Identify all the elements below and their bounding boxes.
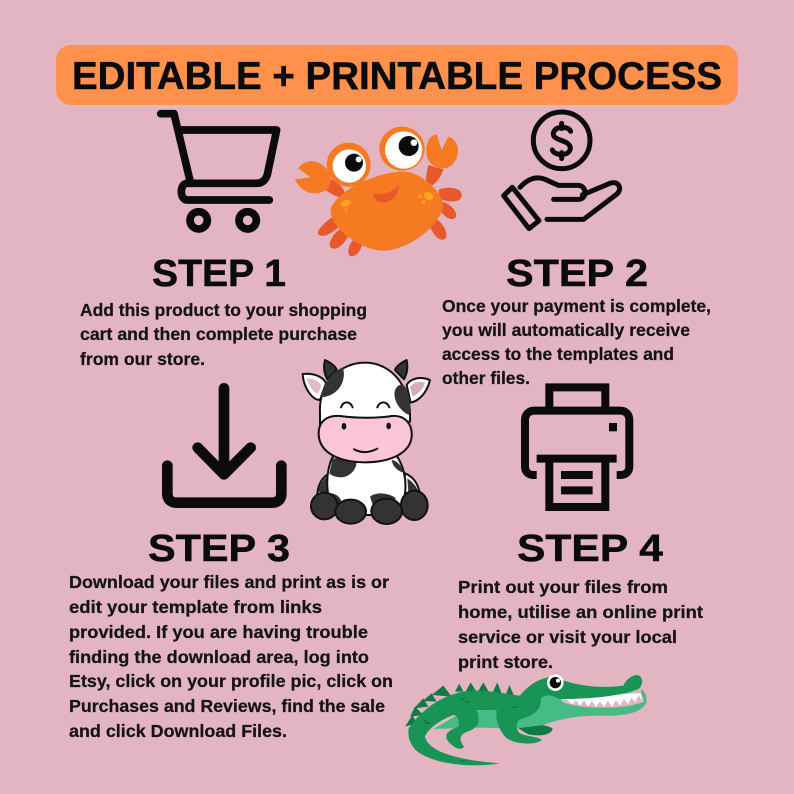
text: step 3 instructions: and click Download Files.	[69, 721, 287, 741]
crab legs	[318, 165, 462, 256]
heading: step 1: STEP 1	[152, 253, 286, 295]
text: step 4 instructions: Print out your files from	[458, 577, 668, 597]
crocodile far leg	[518, 725, 553, 735]
cow head	[320, 363, 410, 427]
crocodile skin spots	[423, 698, 518, 762]
heading: step 3: STEP 3	[148, 528, 290, 570]
icon: hand holding dollar coin	[504, 112, 620, 229]
text: step 3 instructions: provided. If you are having trouble	[69, 622, 368, 642]
text: step 3 instructions: Etsy, click on your profile pic, click on	[69, 671, 393, 691]
crab claws	[295, 161, 330, 193]
crocodile back spikes	[405, 682, 514, 727]
text: step 4 instructions: print store.	[458, 652, 553, 672]
cow thighs	[317, 473, 333, 500]
text: step 3 instructions: finding the download area, log into	[69, 647, 369, 667]
crocodile mouth and lower jaw	[513, 690, 647, 728]
text: step 4 instructions: home, utilise an online print	[458, 602, 703, 622]
text: step 1 instructions	[80, 300, 367, 369]
text: step 2 instructions: Once your payment is complete,	[442, 296, 711, 316]
icon: download arrow	[167, 388, 281, 503]
text: step 1 instructions: cart and then complete purchase	[80, 324, 357, 344]
crocodile body and tail	[408, 675, 642, 765]
crab body	[331, 172, 443, 251]
text: step 2 instructions	[442, 296, 711, 388]
text: step 3 instructions: Purchases and Reviews, find the sale	[69, 696, 385, 716]
cow illustration	[303, 360, 430, 524]
text: step 2 instructions: you will automatically receive	[442, 320, 690, 340]
text: step 3 instructions: edit your template from links	[69, 597, 322, 617]
crocodile eye	[547, 674, 564, 691]
text: step 4 instructions	[458, 577, 703, 672]
crab eyes	[327, 143, 371, 187]
crocodile illustration	[405, 674, 647, 765]
cow ears	[303, 374, 326, 400]
heading: step 4: STEP 4	[517, 528, 663, 570]
cow body	[327, 457, 405, 515]
title	[56, 45, 738, 105]
text: step 3 instructions: Download your files and print as is or	[69, 572, 389, 592]
crocodile belly	[433, 708, 517, 729]
cow face	[341, 402, 389, 452]
text: step 1 instructions: from our store.	[80, 349, 205, 369]
text: step 1 instructions: Add this product to your shopping	[80, 300, 367, 320]
heading: step 2: STEP 2	[506, 253, 648, 295]
crab illustration	[295, 127, 462, 256]
text: step 4 instructions: service or visit your local	[458, 627, 677, 647]
cow horns	[324, 360, 337, 379]
cow feet	[311, 493, 338, 519]
title: EDITABLE + PRINTABLE PROCESS	[72, 55, 722, 98]
icon: printer	[525, 387, 629, 507]
text: step 2 instructions: access to the templates and	[442, 344, 674, 364]
text: step 2 instructions: other files.	[442, 368, 530, 388]
text: step 3 instructions	[69, 572, 393, 741]
icon: shopping cart	[161, 114, 277, 229]
crocodile teeth	[563, 693, 643, 707]
